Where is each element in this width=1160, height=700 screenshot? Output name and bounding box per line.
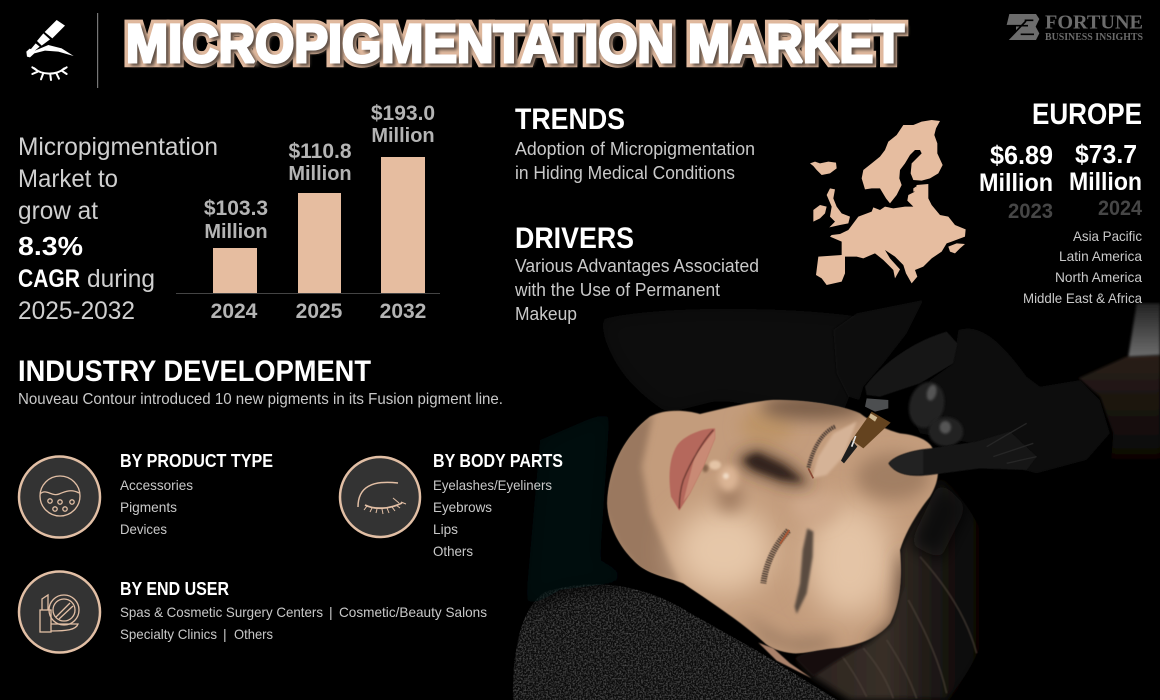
market growth text: 2025-2032 xyxy=(18,297,135,325)
drivers: DRIVERS xyxy=(515,222,634,255)
face xyxy=(600,393,938,678)
other regions list xyxy=(1023,228,1142,306)
segment: by product type: Accessories xyxy=(120,477,193,493)
market growth text: during xyxy=(87,265,155,293)
Europe regional stats: Million xyxy=(979,169,1053,197)
bar chart: $103.3 xyxy=(204,197,268,220)
market growth text: 8.3% xyxy=(18,231,83,261)
segment: by product type: Devices xyxy=(120,521,167,537)
eyelashes upper eye xyxy=(808,427,835,468)
Europe regional stats: Million xyxy=(1069,168,1142,196)
other regions list: North America xyxy=(1055,269,1142,285)
trends: TRENDS xyxy=(515,103,625,136)
lips xyxy=(670,428,715,511)
segment: by end user: | xyxy=(329,604,333,620)
hair xyxy=(795,480,993,700)
Europe regional stats: $73.7 xyxy=(1075,139,1137,169)
bar chart: 2025 xyxy=(296,300,343,323)
eyebrow xyxy=(795,528,813,614)
market growth text: grow at xyxy=(18,197,98,225)
market growth text: Market to xyxy=(18,165,118,193)
bar chart: $110.8 xyxy=(288,140,352,163)
dark garment around neck xyxy=(525,410,640,610)
market growth text xyxy=(18,133,218,325)
segment: by body parts: Eyelashes/Eyeliners xyxy=(433,477,552,493)
segment: by body parts: Eyebrows xyxy=(433,499,492,515)
lower towel xyxy=(513,584,837,700)
icon: FB mark xyxy=(1007,14,1039,40)
other regions list: Asia Pacific xyxy=(1073,228,1142,244)
title: MICROPIGMENTATION MARKET xyxy=(126,14,904,74)
bar chart: Million xyxy=(288,163,352,185)
Europe regional stats: $6.89 xyxy=(990,140,1053,170)
trends: in Hiding Medical Conditions xyxy=(515,163,735,183)
segment: by end user: | xyxy=(223,626,227,642)
segment: by end user: Specialty Clinics xyxy=(120,626,217,642)
market growth text: Micropigmentation xyxy=(18,133,218,161)
upper towel xyxy=(600,309,880,420)
icon: skin pigment layers xyxy=(19,456,100,538)
segment: by end user: Cosmetic/Beauty Salons xyxy=(339,604,487,620)
brand logo: Fortune Business Insights: BUSINESS INSIGHTS xyxy=(1045,32,1143,43)
drivers: Makeup xyxy=(515,304,577,324)
icon: pen xyxy=(29,20,65,53)
trends: Adoption of Micropigmentation xyxy=(515,139,755,159)
photo: woman receiving eyebrow micropigmentation xyxy=(513,300,1160,700)
icon: lipstick and compact mirror xyxy=(19,572,100,652)
title: MICROPIGMENTATION MARKET xyxy=(129,16,907,76)
bar chart: 2032 xyxy=(380,300,426,323)
segment: by product type xyxy=(19,451,273,538)
market growth text: CAGR xyxy=(18,265,80,293)
segment: by body parts: Others xyxy=(433,543,473,559)
map of Europe xyxy=(810,120,966,285)
Europe regional stats xyxy=(979,98,1142,306)
segment: by product type: BY PRODUCT TYPE xyxy=(120,451,273,471)
drivers: Various Advantages Associated xyxy=(515,256,759,276)
segment: by product type: Pigments xyxy=(120,499,177,515)
bar 2025 xyxy=(298,193,341,293)
title: MICROPIGMENTATION MARKET xyxy=(126,14,904,74)
segment: by end user: BY END USER xyxy=(120,579,229,599)
other regions list: Middle East & Africa xyxy=(1023,290,1142,306)
drivers xyxy=(514,222,759,324)
Europe regional stats: 2024 xyxy=(1098,197,1142,220)
Europe regional stats: EUROPE xyxy=(1032,98,1142,131)
gloved hand xyxy=(833,300,1110,476)
bar 2024 xyxy=(213,248,257,293)
drivers: with the Use of Permanent xyxy=(514,280,720,300)
segment: by body parts: BY BODY PARTS xyxy=(433,451,563,471)
brand logo: Fortune Business Insights: FORTUNE xyxy=(1045,12,1143,34)
brand logo: Fortune Business Insights xyxy=(1007,12,1143,43)
segment: by end user xyxy=(19,572,487,652)
tattoo pen xyxy=(865,398,888,412)
industry development: Nouveau Contour introduced 10 new pigments in its Fusion pigment line. xyxy=(18,391,503,408)
icon: eyebrow xyxy=(26,45,74,57)
segment: by body parts: Lips xyxy=(433,521,458,537)
segment: by body parts xyxy=(340,451,563,559)
closed eyelid under pen xyxy=(812,422,857,478)
other regions list: Latin America xyxy=(1059,248,1142,264)
icon: closed eye with lashes xyxy=(340,457,420,537)
ear xyxy=(758,643,812,678)
face shading xyxy=(600,393,930,653)
bar chart: $193.0 xyxy=(371,102,435,125)
eyelashes lower eye xyxy=(763,531,788,583)
industry development xyxy=(18,355,503,408)
industry development: INDUSTRY DEVELOPMENT xyxy=(18,355,371,388)
bar chart xyxy=(176,102,440,323)
Europe regional stats: 2023 xyxy=(1008,200,1053,223)
icon: closed eye xyxy=(32,67,67,80)
arm and sleeve xyxy=(1078,303,1160,473)
segment: by end user: Others xyxy=(234,626,273,642)
bar chart: Million xyxy=(204,221,268,243)
trends xyxy=(515,103,755,183)
bar chart: 2024 xyxy=(211,300,258,323)
header logo icon xyxy=(26,20,74,80)
bar 2032 xyxy=(381,157,425,293)
bar chart: Million xyxy=(371,125,435,147)
segment: by end user: Spas & Cosmetic Surgery Centers xyxy=(120,604,323,620)
